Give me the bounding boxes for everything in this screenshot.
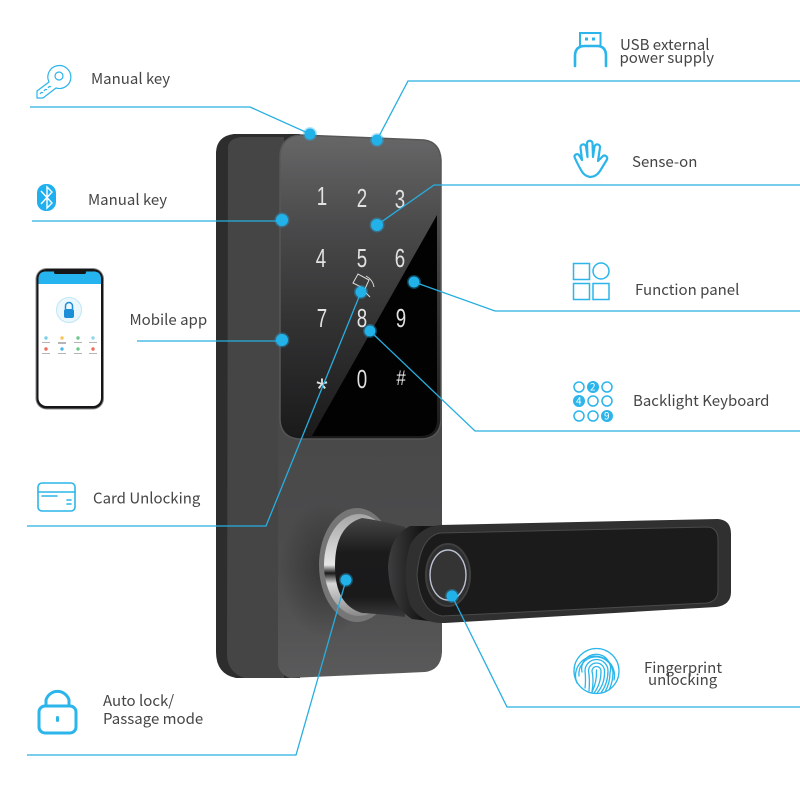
knob rose ring <box>319 508 395 622</box>
keypad digits: 4 <box>316 243 326 273</box>
label: backlight keyboard: Backlight Keyboard <box>633 390 770 411</box>
callout line: sense-on <box>377 185 800 225</box>
keypad digits: 2 <box>357 183 367 213</box>
knob chrome ring <box>324 514 394 616</box>
keypad digits: 3 <box>395 184 405 214</box>
handle neck <box>335 518 405 617</box>
label: power supply: power supply <box>620 47 714 68</box>
label: auto lock: Auto lock/ <box>103 690 174 711</box>
door lock product <box>216 134 731 678</box>
label: passage mode: Passage mode <box>103 708 203 729</box>
icon: card <box>38 483 75 511</box>
callout line: function panel <box>414 282 800 311</box>
label: mobile app: Mobile app <box>130 309 207 330</box>
side body face <box>227 137 284 678</box>
label: bluetooth manual key: Manual key <box>88 189 167 210</box>
icon: keypad: 2 <box>590 378 596 394</box>
keypad digits: 9 <box>396 303 406 333</box>
lock side body <box>216 134 300 678</box>
icon: padlock <box>39 691 76 733</box>
keypad digits: * <box>316 373 328 406</box>
callout line: manual key top <box>30 107 310 134</box>
callout dots <box>274 127 459 603</box>
label: USB external: USB external <box>620 34 709 55</box>
callout line: fingerprint <box>452 596 800 707</box>
icon: function panel <box>574 263 609 300</box>
callout line: backlight keyboard <box>370 331 800 431</box>
label: manual key: Manual key <box>91 68 170 89</box>
callout line: bluetooth <box>32 220 282 222</box>
label: sense-on: Sense-on <box>632 151 697 172</box>
icon: fingerprint <box>574 648 619 694</box>
label: card unlocking: Card Unlocking <box>93 488 201 508</box>
icon: phone with app <box>36 268 104 410</box>
lock front plate <box>278 400 442 678</box>
knob shadow <box>280 502 370 638</box>
icon: key <box>37 66 71 98</box>
icon: keypad: 4 <box>576 392 582 408</box>
handle lever <box>406 519 731 623</box>
keypad digits: 0 <box>357 364 367 394</box>
keypad glass <box>280 135 441 439</box>
keypad digits: 1 <box>317 181 327 211</box>
callout line: USB <box>377 81 800 140</box>
icon: bluetooth <box>37 184 56 211</box>
keypad digits <box>316 181 406 406</box>
callout line: card unlocking <box>27 292 361 526</box>
label: function panel: Function panel <box>635 279 739 300</box>
fingerprint sensor <box>426 544 470 606</box>
icon: hand <box>574 141 607 177</box>
callout line: mobile app <box>137 340 282 342</box>
callout line: auto lock <box>27 580 346 755</box>
keypad dark diagonal <box>312 215 437 436</box>
label: unlocking: unlocking <box>648 669 718 690</box>
keypad digits: 7 <box>317 303 327 333</box>
keypad digits: 6 <box>395 243 405 273</box>
handle collar <box>388 526 445 623</box>
icon: USB <box>575 33 606 66</box>
icon: keypad: 9 <box>604 408 610 422</box>
keypad digits: # <box>396 367 406 391</box>
keypad digits: 8 <box>357 303 367 333</box>
icon: keypad <box>573 378 613 422</box>
card reader icon <box>353 274 374 297</box>
label: fingerprint: Fingerprint <box>644 657 722 678</box>
handle black inset <box>417 527 718 616</box>
keypad digits: 5 <box>357 243 367 273</box>
